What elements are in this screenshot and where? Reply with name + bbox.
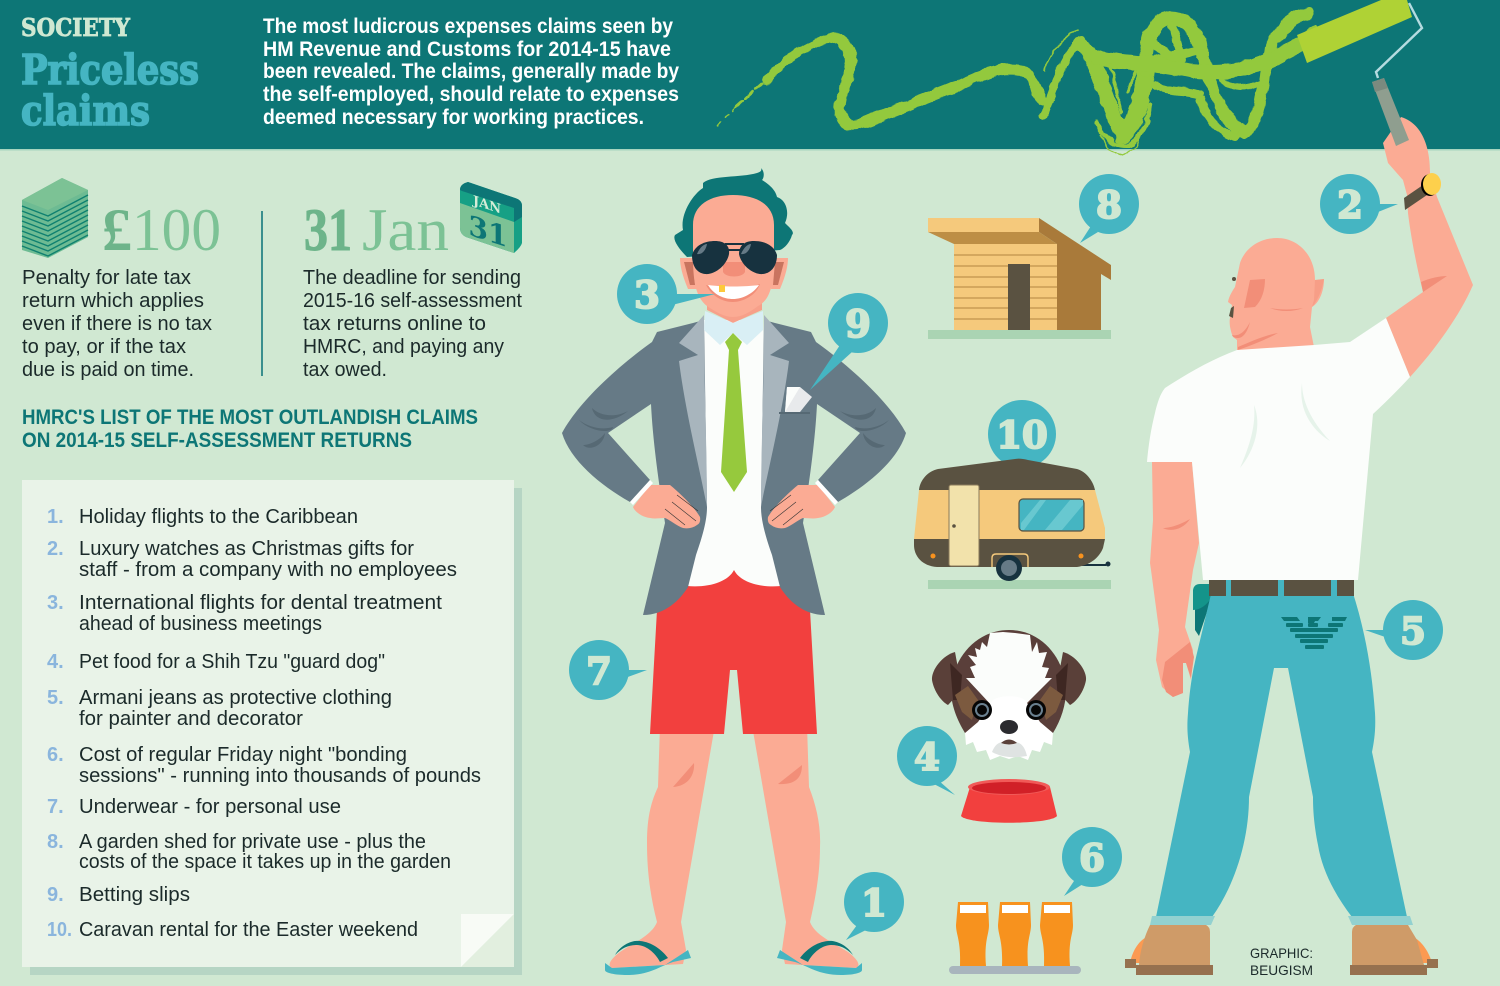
legs [610, 725, 858, 968]
callout 5 [1365, 600, 1443, 660]
list items: Cost of regular Friday night "bonding [79, 744, 407, 766]
roller handle [1372, 3, 1422, 146]
list numbers: 2. [47, 538, 64, 560]
figure: man in suit [562, 168, 906, 975]
figure: £100: £ [102, 197, 132, 263]
intro text: been revealed. The claims, generally made by [263, 60, 679, 83]
shirt [1147, 318, 1410, 580]
intro text: the self-employed, should relate to expenses [263, 83, 679, 106]
heading: list: HMRC'S LIST OF THE MOST OUTLANDISH CLAIMS [22, 406, 478, 429]
text: penalty description: even if there is no tax [22, 313, 212, 335]
text: deadline description: 2015-16 self-assessment [303, 290, 522, 312]
callout 2 [1320, 174, 1398, 234]
tie [721, 333, 747, 492]
callout 9: 9 [845, 302, 871, 346]
roller head [1297, 0, 1412, 63]
title: Priceless [21, 46, 199, 94]
text: deadline description: HMRC, and paying any [303, 336, 504, 358]
figure: 31 Jan: Jan [362, 197, 449, 263]
callout 3 [617, 264, 715, 324]
list items: Armani jeans as protective clothing [79, 687, 392, 709]
callout 7: 7 [586, 649, 612, 693]
callout 4 [897, 726, 957, 795]
illustration: caravan [914, 459, 1111, 589]
callout 7 [569, 640, 647, 700]
illustration: shih tzu dog [932, 630, 1086, 760]
list numbers: 7. [47, 796, 64, 818]
figure: £100: 100 [132, 197, 221, 263]
callout 10: 10 [996, 413, 1048, 457]
lapels [679, 315, 789, 507]
intro text: The most ludicrous expenses claims seen by [263, 15, 673, 38]
list items: Pet food for a Shih Tzu "guard dog" [79, 651, 385, 673]
figure: 31 Jan: 31 [304, 197, 352, 263]
head [1228, 238, 1324, 352]
flip flops [605, 941, 862, 975]
text: deadline description: tax owed. [303, 359, 387, 381]
callout 1 [844, 872, 904, 940]
list numbers: 10. [47, 919, 72, 941]
callout 6: 6 [1079, 836, 1105, 880]
list numbers: 6. [47, 744, 64, 766]
list numbers [47, 506, 72, 941]
list items: ahead of business meetings [79, 613, 322, 635]
callout 8: 8 [1096, 183, 1122, 227]
figure: painter [1125, 0, 1473, 975]
title: claims [21, 87, 150, 135]
shorts [650, 565, 817, 734]
lower arm and hand [1150, 462, 1199, 697]
list items: Caravan rental for the Easter weekend [79, 919, 418, 941]
face [693, 195, 774, 317]
shirt [687, 320, 781, 586]
credit [1250, 945, 1313, 978]
text: deadline description [303, 267, 522, 381]
list items: Holiday flights to the Caribbean [79, 506, 358, 528]
turn-ups [1150, 916, 1413, 925]
icon: calendar: 31 [469, 208, 507, 254]
list items: A garden shed for private use - plus the [79, 831, 426, 853]
list items: for painter and decorator [79, 708, 303, 730]
illustration: shed [928, 218, 1111, 339]
header band [0, 0, 1500, 150]
callout 4: 4 [914, 735, 940, 779]
nose [723, 262, 745, 276]
list items [79, 506, 481, 941]
left shoe [1125, 925, 1213, 975]
icon: stack of paper [22, 178, 88, 258]
text: deadline description: The deadline for sending [303, 267, 521, 289]
raised arm [1383, 117, 1473, 377]
armani logo [1281, 617, 1347, 649]
holster [1193, 584, 1212, 636]
ears [680, 258, 788, 289]
credit: GRAPHIC: [1250, 945, 1313, 961]
pocket square [779, 387, 812, 414]
collar [704, 311, 763, 345]
list items: Underwear - for personal use [79, 796, 341, 818]
belt [1209, 580, 1354, 596]
icon: calendar: JAN [472, 192, 501, 217]
list numbers: 8. [47, 831, 64, 853]
callout 3: 3 [634, 273, 660, 317]
watch [1404, 173, 1441, 210]
jacket right side [761, 320, 906, 615]
callout 8 [1079, 174, 1139, 243]
jacket left side [562, 320, 707, 615]
callout 6 [1062, 827, 1122, 896]
heading: list: ON 2014-15 SELF-ASSESSMENT RETURNS [22, 429, 412, 452]
heading: list [22, 406, 478, 452]
list items: sessions" - running into thousands of pounds [79, 765, 481, 787]
sunglasses [692, 241, 777, 274]
list numbers: 1. [47, 506, 64, 528]
list items: staff - from a company with no employees [79, 559, 457, 581]
list numbers: 5. [47, 687, 64, 709]
section label: society: SOCIETY [21, 13, 131, 42]
hair [674, 168, 793, 257]
list numbers: 3. [47, 592, 64, 614]
panel: claims list [22, 480, 522, 975]
text: penalty description: due is paid on time. [22, 359, 194, 381]
illustration: food bowl [961, 779, 1057, 823]
list items: International flights for dental treatment [79, 592, 442, 614]
divider [261, 211, 263, 376]
icon: calendar [460, 182, 522, 254]
smile and gold tooth [706, 284, 760, 302]
list numbers: 9. [47, 884, 64, 906]
title [21, 46, 199, 135]
callout 1: 1 [861, 881, 887, 925]
callout 9 [810, 293, 888, 390]
text: penalty description: return which applies [22, 290, 204, 312]
arm crease [1421, 276, 1447, 292]
credit: BEUGISM [1250, 962, 1313, 978]
intro text: HM Revenue and Customs for 2014-15 have [263, 38, 671, 61]
jeans [1156, 590, 1407, 917]
callout 2: 2 [1337, 183, 1363, 227]
text: penalty description: Penalty for late tax [22, 267, 191, 289]
list numbers: 4. [47, 651, 64, 673]
neck [707, 295, 762, 323]
jacket creases [579, 408, 889, 448]
intro text [263, 15, 679, 129]
paint squiggle [718, 13, 1315, 156]
list items: Betting slips [79, 884, 190, 906]
right shoe [1350, 925, 1438, 975]
right hand [768, 480, 838, 528]
intro text: deemed necessary for working practices. [263, 106, 644, 129]
list items: costs of the space it takes up in the garden [79, 851, 451, 873]
callout 5: 5 [1400, 609, 1426, 653]
list items: Luxury watches as Christmas gifts for [79, 538, 414, 560]
text: deadline description: tax returns online to [303, 313, 486, 335]
text: penalty description [22, 267, 212, 381]
left hand [630, 480, 700, 528]
callout 10 [988, 400, 1056, 468]
figure: 31 Jan [304, 197, 449, 263]
illustration: three pints [949, 902, 1081, 974]
text: penalty description: to pay, or if the tax [22, 336, 186, 358]
